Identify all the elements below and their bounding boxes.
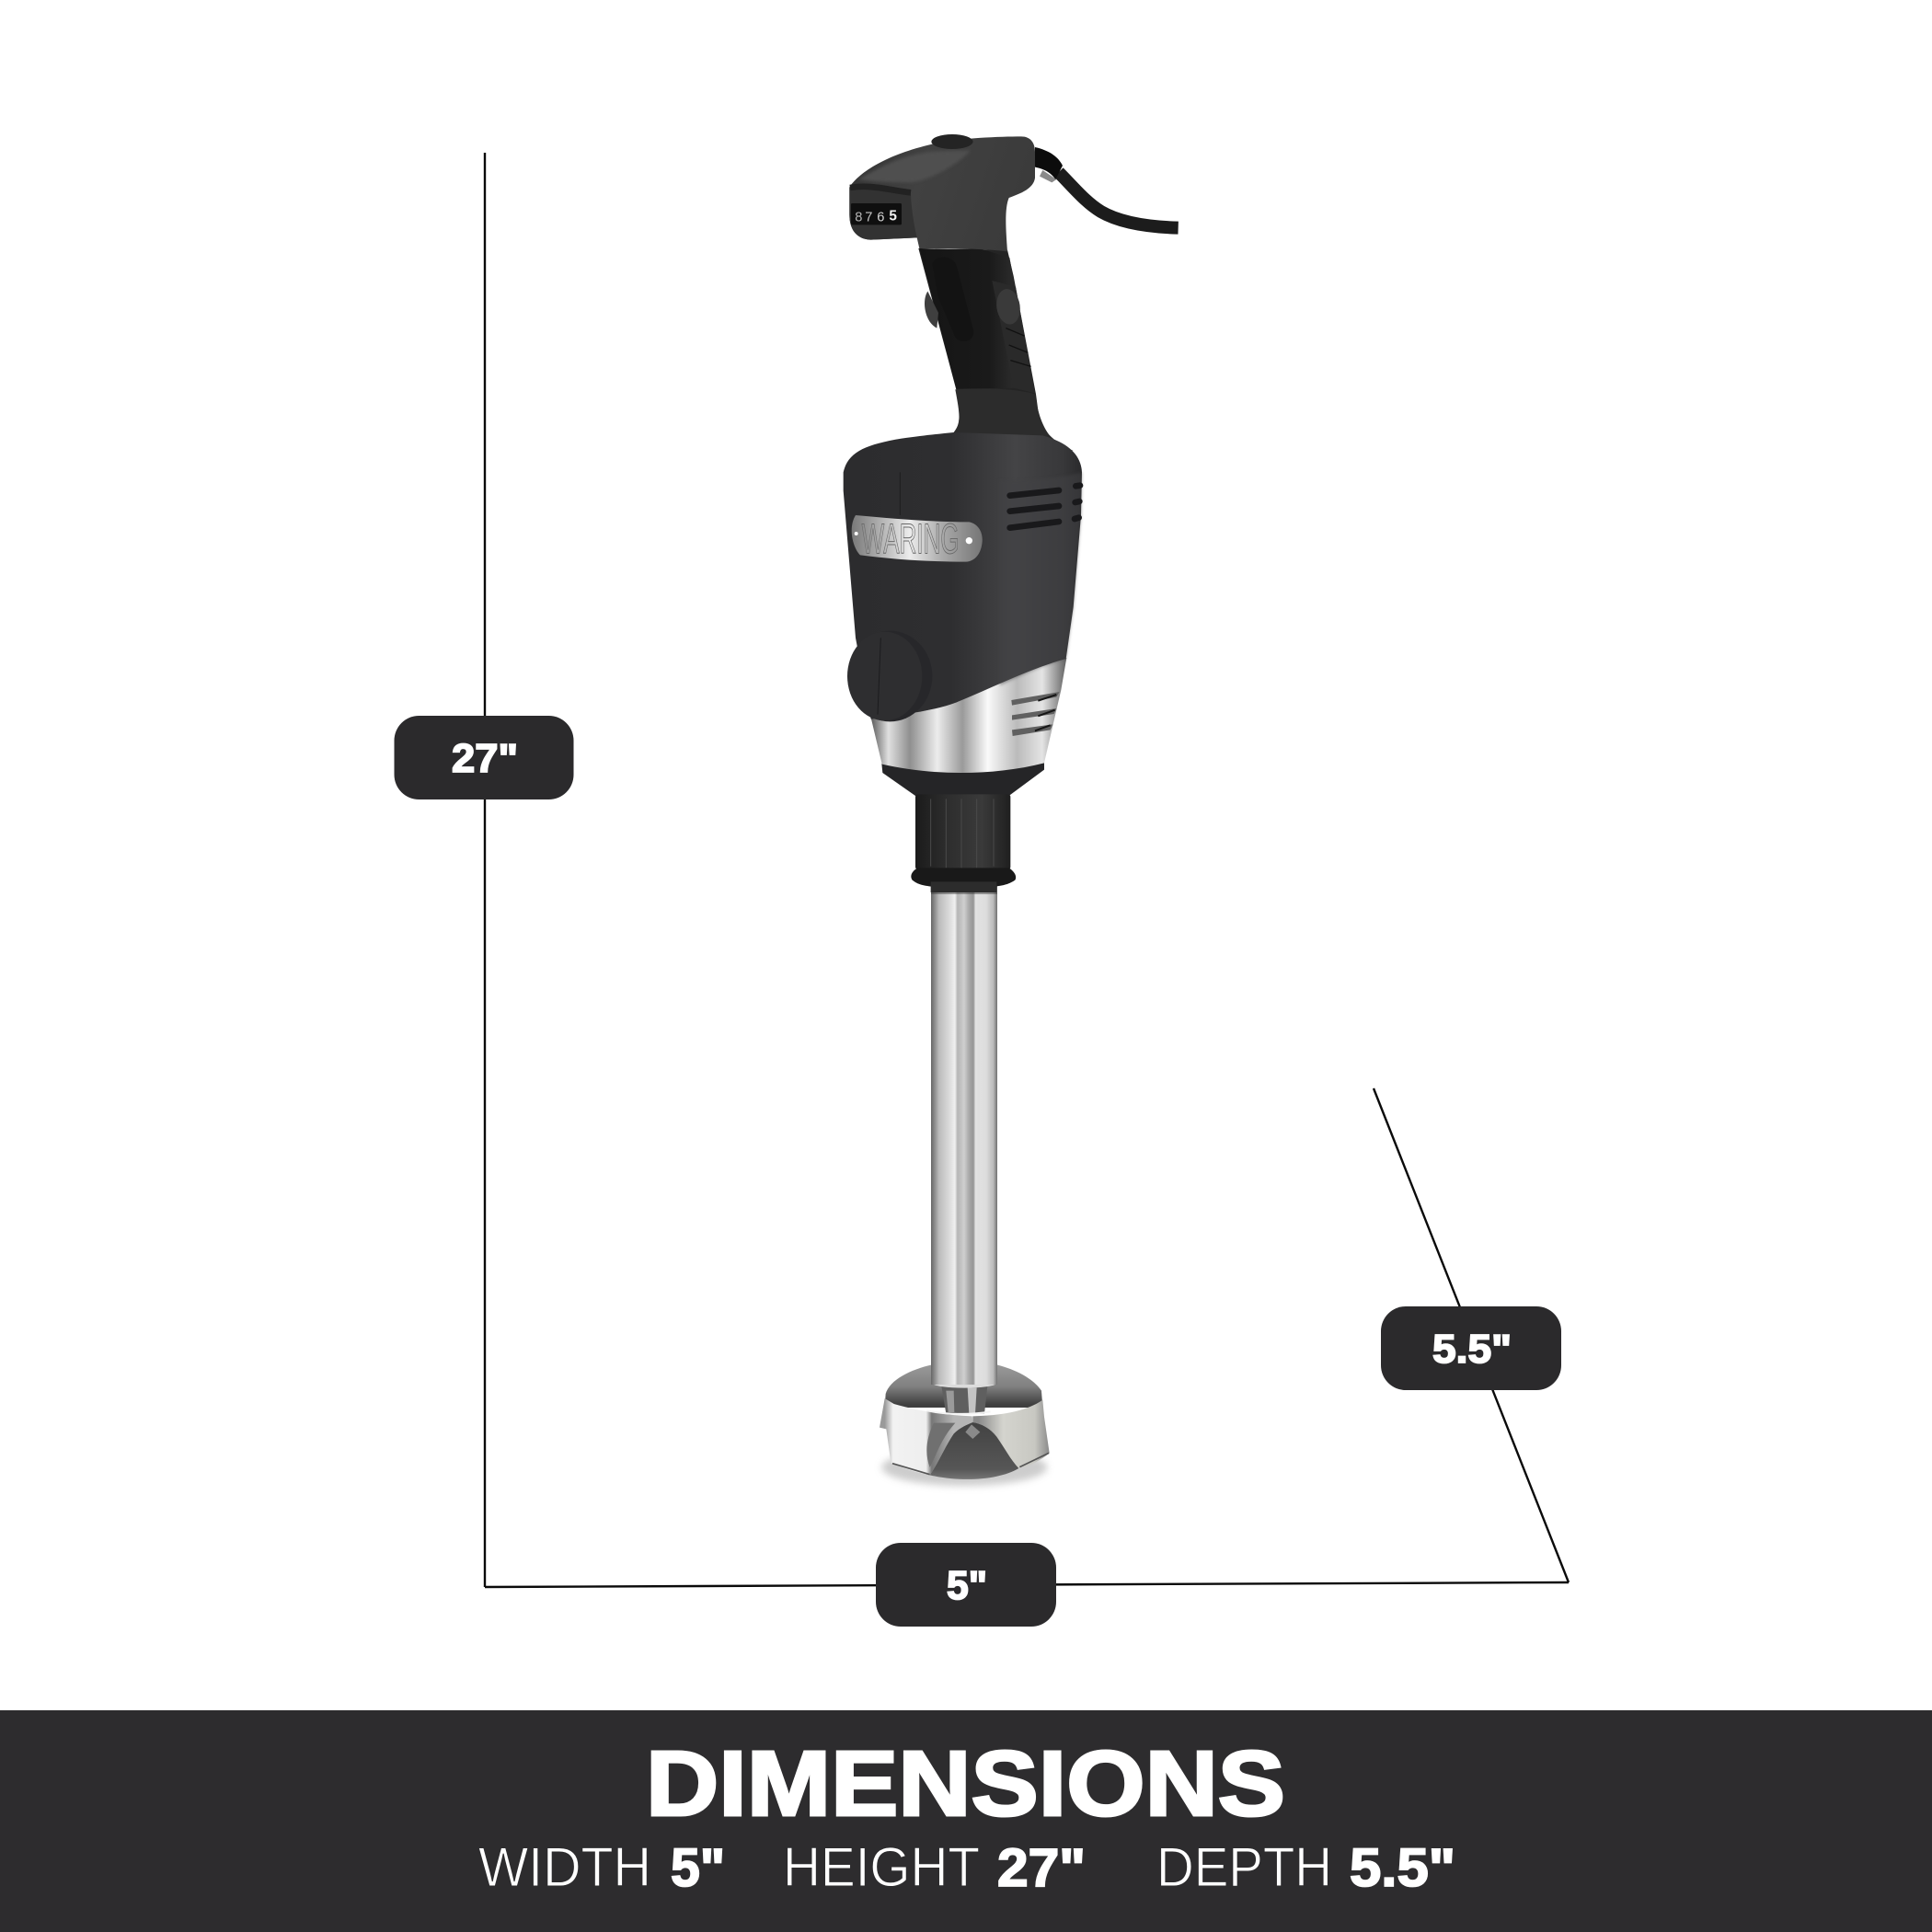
side button xyxy=(995,287,1022,326)
neck and grip xyxy=(918,248,1074,451)
speed dial xyxy=(851,203,902,225)
housing seam xyxy=(899,472,902,515)
height label xyxy=(394,716,574,799)
speed dial: 6 xyxy=(877,211,884,225)
speed dial: 8 xyxy=(855,211,862,225)
knurled nut xyxy=(915,794,1010,869)
motor housing xyxy=(844,432,1082,892)
width label xyxy=(876,1543,1056,1627)
height spec: 27" xyxy=(997,1838,1086,1898)
width label: 5" xyxy=(947,1563,987,1608)
height spec: HEIGHT xyxy=(783,1836,980,1898)
product: immersion blender xyxy=(844,134,1179,1486)
width spec: WIDTH xyxy=(478,1836,651,1898)
width spec: 5" xyxy=(671,1838,725,1898)
handle xyxy=(849,134,1074,451)
top button xyxy=(931,134,973,149)
footer band xyxy=(0,1710,1932,1932)
lower collar xyxy=(881,762,1044,796)
depth label xyxy=(1381,1306,1561,1390)
heading: DIMENSIONS xyxy=(646,1732,1285,1835)
chrome band xyxy=(871,658,1066,773)
depth label: 5.5" xyxy=(1432,1327,1512,1372)
grip pad xyxy=(932,258,973,341)
power cord xyxy=(1035,147,1179,228)
speed dial: 5 xyxy=(889,209,897,224)
nameplate: WARING xyxy=(862,514,960,562)
chrome vents xyxy=(1011,692,1060,736)
housing shell xyxy=(844,432,1082,719)
height spec xyxy=(783,1836,1086,1898)
blade guard xyxy=(880,1364,1050,1486)
handle head xyxy=(849,136,1035,251)
dimension lines xyxy=(485,153,1569,1587)
trigger xyxy=(925,292,938,328)
flange xyxy=(911,868,1016,888)
depth spec: 5.5" xyxy=(1350,1838,1455,1898)
depth spec xyxy=(1156,1836,1455,1898)
body vents xyxy=(1010,486,1080,528)
depth spec: DEPTH xyxy=(1156,1836,1332,1898)
nameplate xyxy=(852,514,983,562)
speed dial: 7 xyxy=(865,211,872,225)
speed knob xyxy=(847,631,932,721)
height label: 27" xyxy=(452,736,518,781)
stainless shaft xyxy=(931,885,997,1385)
